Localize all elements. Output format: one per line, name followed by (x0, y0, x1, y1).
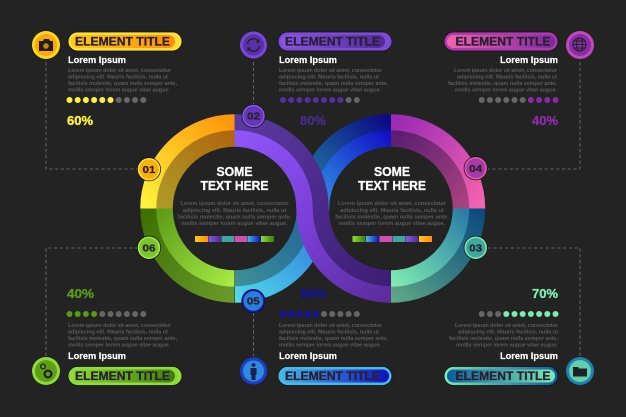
number badges: 05 (247, 296, 260, 308)
body text: Lorem ipsum dolor sit amet, consectetur (68, 323, 172, 329)
title pill: ELEMENT TITLE (75, 36, 170, 48)
colour strip (352, 236, 432, 242)
percentage: 50% (300, 287, 326, 301)
panel: top left (32, 31, 182, 128)
body text: mollis semper lorem augue vitae augue. (279, 88, 381, 94)
title pill (68, 366, 182, 386)
centre text right (335, 165, 449, 242)
title pill: ELEMENT TITLE (75, 371, 170, 383)
panel: bottom centre (240, 287, 392, 386)
heading: SOME (374, 165, 410, 179)
icon: camera (32, 31, 60, 59)
body text: mollis semper lorem augue vitae augue. (455, 88, 557, 94)
body text (448, 68, 558, 94)
icon: gears (32, 357, 60, 385)
segment: blue (235, 122, 391, 294)
body text: mollis semper lorem augue vitae augue. (68, 88, 170, 94)
title pill: ELEMENT TITLE (285, 36, 380, 48)
heading: TEXT HERE (358, 179, 426, 193)
icon: globe (566, 31, 594, 59)
title pill (444, 32, 558, 51)
body text (279, 68, 388, 94)
body text: Lorem ipsum dolor sit amet, consectetur (455, 323, 559, 329)
subtitle: Lorem Ipsum (68, 351, 126, 362)
subtitle: Lorem Ipsum (500, 55, 558, 66)
panel: bottom right (444, 287, 594, 386)
body text (68, 323, 177, 349)
rating dots (66, 311, 146, 317)
body text (68, 68, 177, 94)
number badges: 01 (142, 164, 156, 176)
body text: adipiscing elit. Mauris facilisis, nulla ut (340, 208, 444, 214)
body text: adipiscing elit. Mauris facilisis, nulla ut (279, 329, 379, 335)
panel: top right (444, 31, 594, 128)
panel: bottom left (32, 287, 182, 386)
segment: teal (391, 208, 477, 294)
body text: facilisis molestie, quam nulla semper ante, (279, 81, 388, 87)
title pill (444, 366, 558, 386)
segment: green (148, 208, 234, 294)
segment: purple (234, 122, 391, 295)
percentage: 80% (300, 114, 326, 128)
number badges: 02 (247, 111, 260, 123)
colour strip (195, 236, 274, 242)
icon: folder (566, 357, 594, 385)
icon: person (240, 358, 267, 384)
body text: adipiscing elit. Mauris facilisis, nulla ut (183, 208, 286, 214)
rating dots (280, 311, 360, 317)
number badges: 06 (142, 242, 156, 254)
title pill (278, 366, 392, 386)
body text: adipiscing elit. Mauris facilisis, nulla ut (68, 329, 168, 335)
percentage: 60% (67, 114, 93, 128)
body text (449, 323, 559, 349)
percentage: 40% (67, 287, 94, 301)
segment: pink (391, 122, 477, 208)
body text: adipiscing elit. Mauris facilisis, nulla ut (279, 74, 379, 80)
heading: TEXT HERE (200, 179, 268, 193)
body text: adipiscing elit. Mauris facilisis, nulla ut (458, 329, 558, 335)
subtitle: Lorem Ipsum (279, 55, 337, 66)
icon: refresh (240, 32, 267, 58)
body text (178, 201, 292, 227)
number badges: 03 (469, 242, 482, 254)
panel: top centre (240, 32, 392, 128)
body text: adipiscing elit. Mauris facilisis, nulla ut (68, 74, 168, 80)
body text: facilisis molestie, quam nulla semper ante, (449, 336, 558, 342)
body text: Lorem ipsum dolor sit amet, consectetur (180, 201, 289, 207)
body text: facilisis molestie, quam nulla semper ante, (178, 214, 292, 220)
title pill: ELEMENT TITLE (285, 371, 380, 383)
body text: mollis semper lorem augue vitae augue. (456, 343, 558, 349)
body text: Lorem ipsum dolor sit amet, consectetur (279, 323, 383, 329)
title pill (278, 32, 392, 51)
heading (358, 165, 426, 193)
body text: adipiscing elit. Mauris facilisis, nulla ut (457, 74, 557, 80)
body text: mollis semper lorem augue vitae augue. (181, 221, 288, 227)
body text (279, 323, 388, 349)
rating dots (479, 311, 558, 317)
percentage: 70% (532, 287, 558, 301)
subtitle: Lorem Ipsum (68, 55, 126, 66)
body text: Lorem ipsum dolor sit amet, consectetur (279, 68, 383, 74)
body text: mollis semper lorem augue vitae augue. (68, 343, 170, 349)
body text: facilisis molestie, quam nulla semper ante, (68, 336, 177, 342)
body text: Lorem ipsum dolor sit amet, consectetur (454, 68, 558, 74)
rating dots (280, 97, 360, 103)
infinity ring chart (148, 122, 477, 295)
title pill: ELEMENT TITLE (456, 36, 551, 48)
dashed connectors (46, 62, 580, 356)
body text: Lorem ipsum dolor sit amet, consectetur (68, 68, 172, 74)
subtitle: Lorem Ipsum (279, 351, 337, 362)
segment: gold (148, 122, 234, 208)
body text: facilisis molestie, quam nulla semper ante, (448, 81, 557, 87)
centre text left (178, 165, 292, 242)
title pill: ELEMENT TITLE (456, 371, 551, 383)
body text: facilisis molestie, quam nulla semper ante, (68, 81, 177, 87)
heading (200, 165, 268, 193)
title pill (68, 32, 182, 51)
body text: mollis semper lorem augue vitae augue. (279, 343, 381, 349)
subtitle: Lorem Ipsum (500, 351, 558, 362)
number badges: 04 (469, 163, 482, 175)
number badges (137, 104, 488, 313)
percentage: 40% (532, 114, 558, 128)
heading: SOME (216, 165, 252, 179)
body text: Lorem ipsum dolor sit amet, consectetur (338, 201, 447, 207)
body text (335, 201, 449, 227)
body text: mollis semper lorem augue vitae augue. (339, 221, 446, 227)
rating dots (479, 97, 558, 103)
body text: facilisis molestie, quam nulla semper ante, (335, 214, 449, 220)
rating dots (66, 97, 146, 103)
body text: facilisis molestie, quam nulla semper ante, (279, 336, 388, 342)
